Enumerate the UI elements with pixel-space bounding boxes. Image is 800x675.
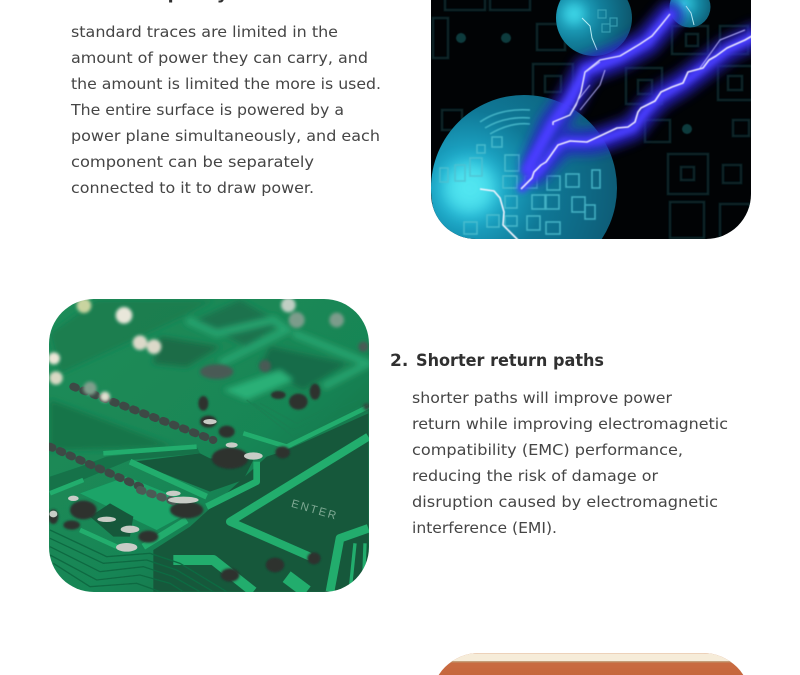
image: copper laminate board (cropped at bottom edge)	[431, 653, 751, 675]
large sphere	[431, 95, 617, 239]
dark board regions	[153, 413, 368, 592]
text block: power capacity description: standard traces are limited in the	[71, 23, 338, 41]
blurred background solder	[48, 298, 370, 410]
text block: power capacity description: the amount is limited the more is used.	[71, 75, 381, 93]
text block: shorter return paths description: shorter paths will improve power	[412, 389, 673, 407]
background square pattern	[433, 0, 752, 238]
text block: power capacity description: power plane simultaneously, and each	[71, 127, 380, 145]
text block: shorter return paths description: return while improving electromagnetic	[412, 415, 728, 433]
text block: power capacity description: component can be separately	[71, 153, 314, 171]
text block: power capacity description: The entire surface is powered by a	[70, 101, 344, 119]
text block: shorter return paths description: reducing the risk of damage or	[412, 467, 659, 485]
solder joints	[48, 384, 321, 582]
heading: shorter return paths: Shorter return paths	[416, 351, 604, 371]
solder highlights	[49, 419, 263, 552]
text block: power capacity description: amount of power they can carry, and	[71, 49, 368, 67]
text block: power capacity description	[70, 23, 381, 197]
small sphere	[670, 0, 710, 28]
fine parallel traces	[50, 397, 360, 592]
image: glowing blue spheres with lightning	[431, 0, 751, 239]
solder pin rows	[50, 387, 213, 503]
text block: shorter return paths description: interference (EMI).	[412, 519, 557, 537]
bright green traces	[50, 407, 368, 592]
text block: shorter return paths description: disruption caused by electromagnetic	[412, 493, 718, 511]
image: green circuit board	[47, 297, 373, 597]
ENTER silkscreen label: ENTER	[290, 498, 337, 522]
text block: power capacity description: connected to it to draw power.	[71, 179, 314, 197]
lightning bolts	[480, 14, 752, 240]
blurred background traces	[50, 300, 368, 450]
medium sphere	[556, 0, 632, 56]
heading: shorter return paths: 2.	[390, 351, 408, 371]
text block: shorter return paths description: compatibility (EMC) performance,	[412, 441, 683, 459]
lightning glow	[522, 15, 755, 188]
text block: shorter return paths description	[412, 389, 728, 537]
